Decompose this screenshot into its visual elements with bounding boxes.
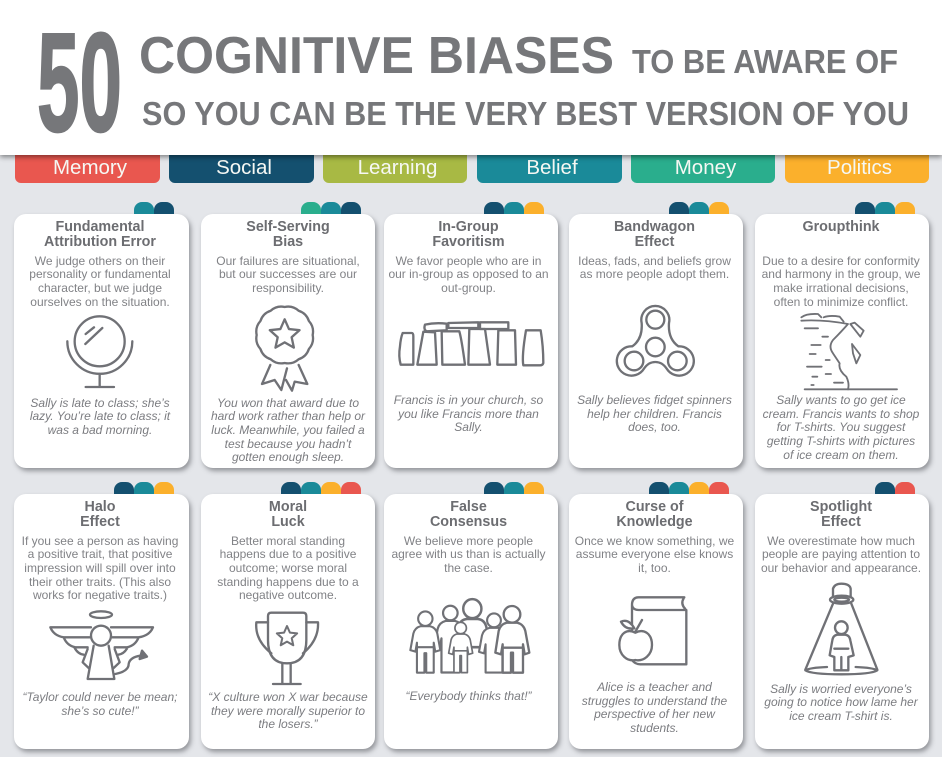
panel: Groupthink — [755, 214, 929, 468]
example: struggles to understand the — [582, 694, 727, 708]
description: We overestimate how much — [767, 534, 915, 548]
heading: Effect — [80, 514, 120, 530]
category tabs — [114, 482, 174, 494]
description: outcome; worse moral — [229, 561, 347, 575]
description: Once we know something, we — [575, 534, 734, 548]
description — [391, 534, 546, 575]
example — [763, 393, 919, 462]
category tabs — [484, 482, 544, 494]
heading: Halo — [84, 498, 115, 514]
category tab: Money: Money — [675, 156, 736, 179]
example: Sally wants to go get ice — [776, 393, 906, 407]
description: responsibility. — [252, 281, 324, 295]
heading — [430, 498, 507, 530]
heading: In-Group — [438, 218, 499, 234]
icon: book and apple — [617, 595, 688, 667]
example — [30, 396, 170, 437]
description: people are paying attention to — [762, 547, 920, 561]
example: perspective of her new — [594, 707, 715, 721]
icon: trophy — [255, 612, 320, 686]
description: as more people adopt them. — [580, 267, 729, 281]
panel: Halo Effect — [14, 494, 189, 749]
description: We favor people who are in — [396, 254, 541, 268]
example: “Taylor could never be mean; — [22, 690, 177, 704]
example: of ice cream on them. — [783, 448, 899, 462]
panel: In-Group Favoritism — [384, 214, 558, 468]
category tab: Belief — [477, 150, 622, 183]
heading — [753, 500, 929, 530]
description: ourselves on the situation. — [30, 295, 170, 309]
category tab: Belief: Belief — [526, 156, 578, 179]
example: Sally. — [454, 420, 483, 434]
category tabs — [669, 202, 729, 214]
heading: Effect — [821, 514, 861, 530]
heading: Groupthink — [802, 218, 880, 234]
category tab: Learning: Learning — [358, 156, 437, 179]
description: Better moral standing — [231, 534, 345, 548]
heading: cognitive biases: COGNITIVE BIASES — [139, 27, 614, 85]
example: hard work rather than help or — [211, 409, 365, 423]
heading: Moral — [269, 498, 307, 514]
heading: False — [450, 498, 487, 514]
example: Alice is a teacher and — [597, 680, 712, 694]
description: Due to a desire for conformity — [762, 254, 920, 268]
panel: Moral Luck — [201, 494, 375, 749]
example: getting T-shirts with pictures — [767, 434, 915, 448]
heading: Bias — [273, 234, 303, 250]
description: impression will spill over into — [24, 561, 176, 575]
example: going to notice how lame her — [764, 695, 918, 709]
category tabs — [281, 482, 361, 494]
icon: group of people — [409, 598, 530, 674]
heading: Effect — [635, 234, 674, 250]
example: gotten enough sleep. — [232, 450, 344, 464]
example: you like Francis more than — [398, 407, 539, 421]
example: for T-shirts. You suggest — [777, 420, 905, 434]
description — [388, 254, 549, 295]
description: often to minimize conflict. — [774, 295, 908, 309]
description: negative outcome. — [239, 588, 337, 602]
example: was a bad morning. — [48, 423, 152, 437]
description: the case. — [444, 561, 493, 575]
description: Our failures are situational, — [216, 254, 360, 268]
description — [566, 535, 743, 576]
example: lazy. You’re late to class; it — [30, 409, 170, 423]
heading: Spotlight — [810, 498, 872, 514]
icon: stonehenge — [398, 321, 544, 366]
description — [753, 535, 929, 576]
example: Sally is worried everyone’s — [770, 682, 912, 696]
description: out-group. — [441, 281, 496, 295]
description: and harmony in the group, we — [762, 267, 920, 281]
description — [29, 254, 171, 309]
heading: Bandwagon — [614, 218, 695, 234]
description — [578, 254, 731, 281]
panel: Fundamental Attribution Error — [14, 214, 189, 468]
description: our in-group as opposed to an — [388, 267, 549, 281]
example — [577, 393, 732, 434]
description: agree with us than is actually — [391, 547, 546, 561]
example: Sally is late to class; she’s — [30, 396, 170, 410]
example: she’s so cute!” — [61, 704, 139, 718]
example — [208, 690, 368, 731]
category tab: Memory — [15, 150, 160, 183]
title banner — [0, 0, 942, 155]
description: personality or fundamental — [29, 267, 171, 281]
category tabs — [855, 202, 915, 214]
example — [566, 681, 743, 736]
description: assume everyone else knows — [576, 547, 733, 561]
description — [22, 534, 178, 602]
description: their other traits. (This also — [29, 575, 171, 589]
heading: Favoritism — [432, 234, 505, 250]
description: happens due to a positive — [220, 547, 356, 561]
example — [211, 396, 366, 464]
heading — [614, 218, 695, 250]
icon: award rosette — [255, 305, 314, 392]
panel: Spotlight Effect — [755, 494, 929, 749]
heading: Luck — [271, 514, 305, 530]
description: Ideas, fads, and beliefs grow — [578, 254, 731, 268]
example: luck. Meanwhile, you failed a — [211, 423, 365, 437]
description — [762, 254, 920, 309]
heading — [44, 218, 156, 250]
heading: Consensus — [430, 514, 507, 530]
category tab: Politics: Politics — [827, 156, 892, 179]
heading — [246, 218, 330, 250]
category tab: Social — [169, 150, 314, 183]
description: it, too. — [638, 561, 671, 575]
example: “X culture won X war because — [208, 690, 368, 704]
description: but our successes are our — [219, 267, 357, 281]
description: We judge others on their — [35, 254, 165, 268]
heading — [80, 498, 120, 530]
example: help her children. Francis — [587, 407, 722, 421]
example: does, too. — [628, 420, 681, 434]
category tab: Social: Social — [216, 156, 272, 179]
category tab: Learning — [323, 150, 467, 183]
example — [22, 690, 177, 718]
category tabs — [301, 202, 361, 214]
category tabs — [134, 202, 174, 214]
description: If you see a person as having — [22, 534, 178, 548]
heading — [616, 498, 693, 530]
heading: Attribution Error — [44, 234, 156, 250]
heading — [269, 498, 307, 530]
icon: cliff — [800, 313, 898, 390]
heading: Curse of — [626, 498, 684, 514]
description: We believe more people — [404, 534, 533, 548]
category tabs — [649, 482, 729, 494]
category tabs — [484, 202, 544, 214]
panel: Curse of Knowledge — [569, 494, 743, 749]
description: make irrational decisions, — [773, 281, 909, 295]
example: cream. Francis wants to shop — [763, 407, 919, 421]
heading: Self-Serving — [246, 218, 330, 234]
panel: Self-Serving Bias — [201, 214, 375, 468]
description: a positive trait, that positive — [28, 547, 172, 561]
example — [753, 682, 929, 724]
icon: fidget spinner — [616, 304, 695, 377]
category tab: Money — [631, 150, 775, 183]
description: our behavior and appearance. — [761, 561, 921, 575]
heading: Fundamental — [56, 218, 144, 234]
panel: Bandwagon Effect — [569, 214, 743, 468]
example: the losers.” — [258, 717, 318, 731]
example: Francis is in your church, so — [394, 393, 543, 407]
heading — [432, 218, 505, 250]
icon: mirror — [66, 315, 134, 388]
heading: Knowledge — [616, 514, 693, 530]
example: Sally believes fidget spinners — [577, 393, 732, 407]
category tab: Politics — [785, 150, 929, 183]
example: You won that award due to — [217, 396, 359, 410]
example: test because you hadn’t — [225, 437, 351, 451]
description — [216, 254, 360, 295]
description: standing happens due to a — [217, 575, 359, 589]
example: ice cream T-shirt is. — [789, 709, 893, 723]
panel: False Consensus — [384, 494, 558, 749]
description: works for negative traits.) — [33, 588, 167, 602]
icon: spotlight on a person — [803, 581, 880, 678]
category tab: Memory: Memory — [53, 156, 127, 179]
example: they were morally superior to — [211, 704, 365, 718]
category tabs — [875, 482, 915, 494]
description: character, but we judge — [38, 281, 162, 295]
example — [394, 393, 543, 434]
example: students. — [630, 721, 679, 735]
description — [217, 534, 359, 602]
heading: to be aware of: TO BE AWARE OF — [632, 43, 898, 80]
example: “Everybody thinks that!” — [405, 688, 532, 702]
icon: angel with devil tail — [49, 610, 154, 680]
